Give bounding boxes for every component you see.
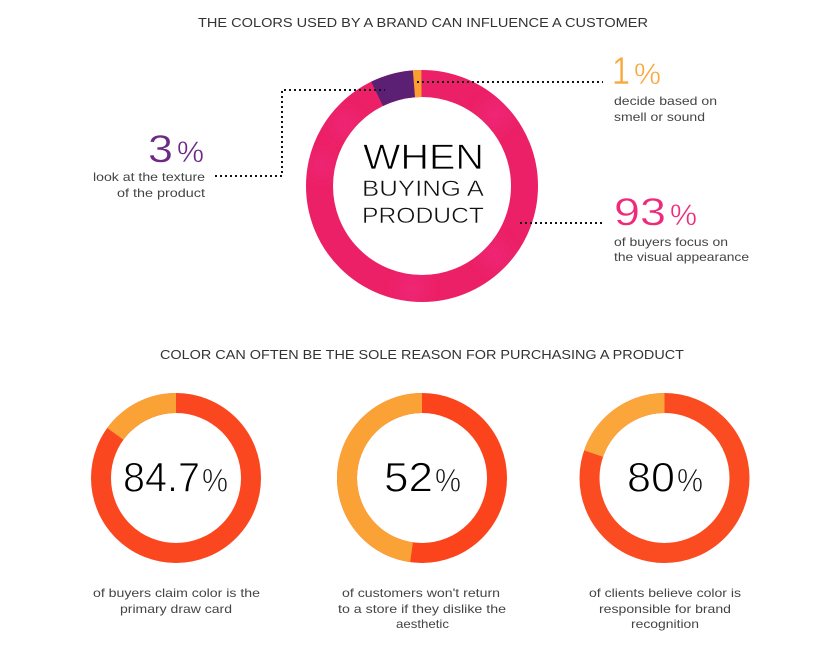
callout: 93%: the visual appearance xyxy=(614,250,749,264)
caption: 52%: to a store if they dislike the xyxy=(338,602,506,616)
donut: 80% xyxy=(590,403,740,553)
callout: 3%: of the product xyxy=(117,186,206,200)
callout: 1% xyxy=(612,50,717,124)
callout: 3%: 3 xyxy=(148,128,173,171)
callout: 93%: 93 xyxy=(614,191,666,234)
callout: 3%: % xyxy=(177,136,204,169)
donut center label: WHEN xyxy=(363,138,484,177)
caption: 80%: responsible for brand xyxy=(599,602,731,616)
callout: 1%: smell or sound xyxy=(614,110,705,124)
donut: 80%: 80 xyxy=(627,454,675,500)
donut: 52% xyxy=(347,403,497,553)
caption: 84.7% xyxy=(93,586,260,616)
segment: 1% smell or sound xyxy=(414,70,421,97)
donut: 84.7%: % xyxy=(202,462,228,498)
donut: 84.7%: 84.7 xyxy=(123,454,200,500)
donut center label xyxy=(362,138,484,228)
leader line: 1% xyxy=(417,81,603,83)
caption: 52%: aesthetic xyxy=(396,617,449,631)
callout: 3% xyxy=(93,128,206,200)
donut center label: BUYING A xyxy=(362,176,484,201)
callout: 1%: decide based on xyxy=(614,94,717,108)
caption: 52%: of customers won't return xyxy=(342,586,500,600)
callout: 1%: 1 xyxy=(612,50,630,93)
heading: brand colors: THE COLORS USED BY A BRAND CAN INFLUENCE A CUSTOMER xyxy=(198,16,648,30)
heading: sole reason: COLOR CAN OFTEN BE THE SOLE REASON FOR PURCHASING A PRODUCT xyxy=(160,348,684,362)
donut center label: PRODUCT xyxy=(362,203,484,228)
caption: 52% xyxy=(338,586,506,631)
donut: 52%: 52 xyxy=(384,454,433,500)
caption: 84.7%: primary draw card xyxy=(120,602,232,616)
callout: 3%: look at the texture xyxy=(93,170,205,184)
caption: 80% xyxy=(589,586,741,631)
leader line: 93% xyxy=(520,222,603,224)
donut: 52%: % xyxy=(435,462,461,498)
caption: 84.7%: of buyers claim color is the xyxy=(93,586,260,600)
callout: 1%: % xyxy=(634,58,661,91)
callout: 93%: % xyxy=(670,199,697,232)
donut: 84.7% xyxy=(101,403,251,553)
caption: 80%: of clients believe color is xyxy=(589,586,741,600)
segment: 3% texture xyxy=(377,84,414,94)
donut: 80%: % xyxy=(677,462,703,498)
callout: 93% xyxy=(614,191,749,264)
donut chart: when buying a product xyxy=(310,84,524,303)
caption: 80%: recognition xyxy=(631,617,699,631)
leader line: 3% xyxy=(215,90,385,176)
callout: 93%: of buyers focus on xyxy=(614,235,728,249)
